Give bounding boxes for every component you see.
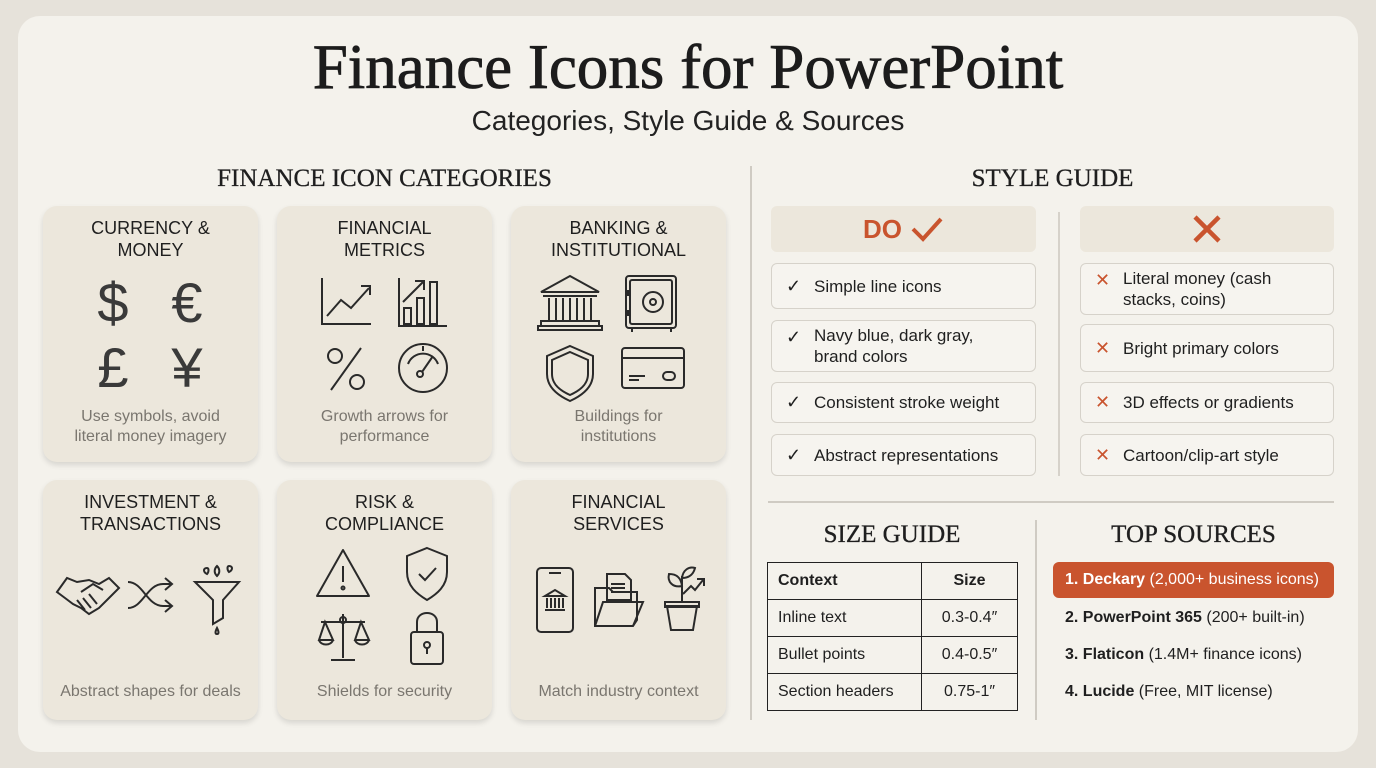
card: currency & money: literal money imagery <box>74 428 227 445</box>
card: investment & transactions <box>43 480 258 720</box>
do items: ✓ <box>786 392 801 412</box>
do header <box>771 206 1036 252</box>
size table: Context <box>778 572 838 589</box>
size table: 0.75-1″ <box>944 683 995 700</box>
icons: handshake, shuffle arrows, funnel <box>56 564 242 635</box>
icons: currency symbols: £ <box>97 336 129 399</box>
card: financial metrics: performance <box>340 428 429 445</box>
size table: 0.4-0.5″ <box>942 646 997 663</box>
card: financial metrics: Growth arrows for <box>321 408 448 425</box>
card: risk & compliance: RISK & <box>355 492 414 512</box>
card: risk & compliance: Shields for security <box>317 683 452 700</box>
icons: warning, shield check, scales, lock <box>316 546 448 665</box>
card: financial services: FINANCIAL <box>571 492 666 512</box>
card: banking & institutional: BANKING & <box>569 218 668 238</box>
sources list <box>1053 562 1334 700</box>
card: banking & institutional: INSTITUTIONAL <box>551 240 686 260</box>
card: investment & transactions: TRANSACTIONS <box>80 514 221 534</box>
card: financial metrics: FINANCIAL <box>337 218 432 238</box>
do items: Abstract representations <box>814 446 998 464</box>
do items: ✓ <box>786 444 801 464</box>
heading: top sources: TOP SOURCES <box>1111 521 1276 548</box>
don't items <box>1080 263 1334 476</box>
sources list: 3. Flaticon (1.4M+ finance icons) <box>1065 646 1302 663</box>
title: Finance Icons for PowerPoint <box>313 32 1063 102</box>
card: currency & money: MONEY <box>117 240 184 260</box>
do items <box>771 263 1036 476</box>
icons: currency symbols: $ <box>97 271 129 334</box>
highlighted source: 1. Deckary (2,000+ business icons) <box>1065 571 1319 588</box>
card: risk & compliance <box>277 480 492 720</box>
don't items: 3D effects or gradients <box>1123 393 1294 412</box>
card: financial metrics: METRICS <box>344 240 425 260</box>
card: financial services: SERVICES <box>573 514 664 534</box>
size table: Inline text <box>778 609 846 626</box>
do items: brand colors <box>814 347 908 366</box>
don't items: ✕ <box>1095 392 1110 412</box>
heading: finance icon categories: FINANCE ICON CATEGORIES <box>217 165 552 192</box>
do items: Consistent stroke weight <box>814 393 999 412</box>
card: financial services <box>511 480 726 720</box>
don't items: Cartoon/clip-art style <box>1123 446 1279 464</box>
card: financial metrics <box>277 206 492 462</box>
divider vertical small <box>1035 520 1036 720</box>
icons: currency symbols: ¥ <box>170 336 203 399</box>
do items: ✓ <box>786 276 801 296</box>
don't items: ✕ <box>1095 444 1110 464</box>
don't items: ✕ <box>1095 270 1110 290</box>
card: risk & compliance: COMPLIANCE <box>325 514 444 534</box>
icons: mobile bank, folder, plant growth <box>536 566 705 633</box>
don't items: Bright primary colors <box>1123 338 1279 358</box>
icons: bank, safe, shield, credit card <box>537 274 685 402</box>
sources list: 2. PowerPoint 365 (200+ built-in) <box>1065 609 1305 626</box>
card: banking & institutional: Buildings for <box>574 408 663 425</box>
card: financial services: Match industry context <box>538 683 699 700</box>
card: banking & institutional: institutions <box>581 428 656 445</box>
icons: currency symbols: € <box>171 271 203 334</box>
card: banking & institutional <box>511 206 726 462</box>
divider vertical <box>750 166 752 720</box>
divider between do/don't <box>1058 212 1060 476</box>
card: investment & transactions: Abstract shapes for deals <box>60 683 241 700</box>
size table: Section headers <box>778 683 894 700</box>
don't header <box>1080 206 1334 252</box>
sources list: 4. Lucide (Free, MIT license) <box>1065 683 1273 700</box>
don't items: stacks, coins) <box>1123 290 1226 309</box>
card: currency & money: Use symbols, avoid <box>81 408 220 425</box>
highlighted source <box>1053 562 1334 598</box>
card: currency & money: CURRENCY & <box>91 218 210 238</box>
heading: size guide: SIZE GUIDE <box>824 521 960 548</box>
don't items: Literal money (cash <box>1123 269 1271 288</box>
divider horizontal <box>768 501 1334 502</box>
card: investment & transactions: INVESTMENT & <box>84 492 217 512</box>
size table <box>767 562 1018 711</box>
card: currency & money <box>43 206 258 462</box>
size table: 0.3-0.4″ <box>942 609 997 626</box>
icons: currency symbols <box>97 271 203 399</box>
icons: charts, percent, gauge <box>321 278 448 393</box>
size table: Bullet points <box>778 646 865 663</box>
heading: style guide: STYLE GUIDE <box>972 165 1133 192</box>
do items: ✓ <box>786 327 801 347</box>
don't items: ✕ <box>1095 338 1110 358</box>
subtitle: Categories, Style Guide & Sources <box>472 105 904 136</box>
size table: Size <box>953 572 986 589</box>
do header: DO <box>863 214 902 244</box>
do items: Simple line icons <box>814 276 942 296</box>
do items: Navy blue, dark gray, <box>814 326 973 345</box>
